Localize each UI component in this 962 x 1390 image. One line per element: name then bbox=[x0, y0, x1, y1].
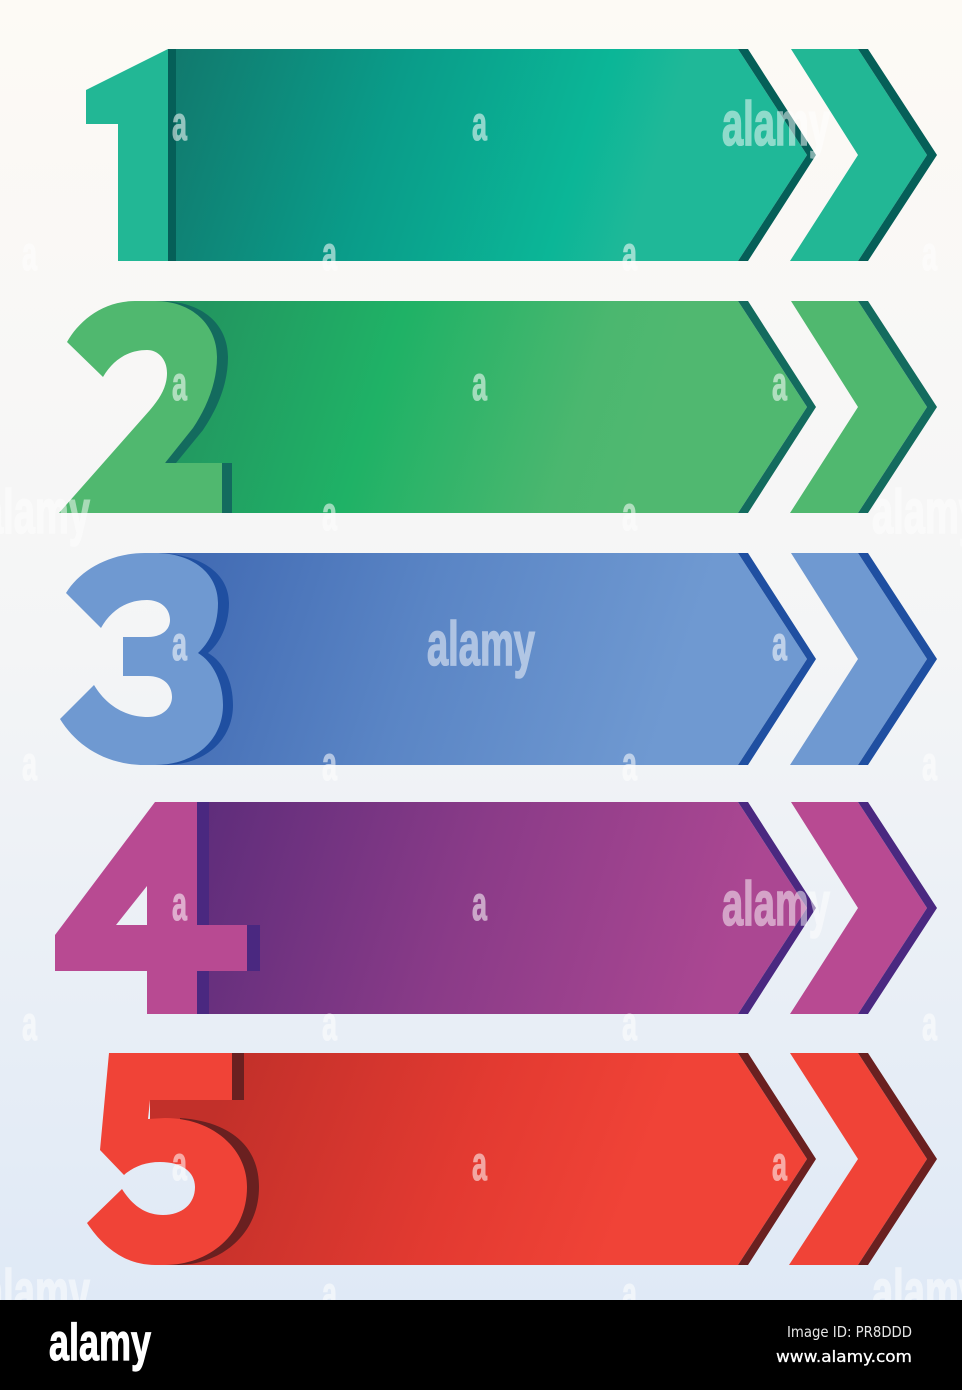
watermark marks: a bbox=[622, 998, 637, 1051]
watermark marks: alamy bbox=[722, 90, 830, 159]
banner 4 panel bbox=[197, 802, 807, 1014]
watermark marks: a bbox=[472, 878, 487, 931]
banner 5 numeral shadow bbox=[165, 1053, 259, 1265]
banner 5 arrow edge shadow bbox=[738, 1053, 816, 1265]
footer logo: alamy bbox=[49, 1314, 151, 1372]
banner 2 bbox=[59, 301, 937, 513]
watermark marks: a bbox=[472, 358, 487, 411]
watermark marks: a bbox=[172, 358, 187, 411]
banner 2 chevron bbox=[790, 301, 937, 513]
watermark marks: a bbox=[22, 998, 37, 1051]
banner 5 bbox=[87, 1053, 937, 1265]
banner 3 numeral shadow bbox=[150, 553, 233, 765]
watermark marks: a bbox=[322, 228, 337, 281]
watermark marks: a bbox=[172, 618, 187, 671]
watermark marks: a bbox=[922, 228, 937, 281]
banner 3 chevron bbox=[790, 553, 937, 765]
watermark marks: a bbox=[622, 1268, 637, 1321]
banner 2 panel bbox=[160, 301, 807, 513]
watermark marks: a bbox=[772, 358, 787, 411]
watermark marks: a bbox=[172, 98, 187, 151]
banner 1 bbox=[86, 49, 937, 261]
watermark marks: a bbox=[22, 228, 37, 281]
banner 3 bbox=[60, 553, 937, 765]
banner 4 chevron bbox=[790, 802, 937, 1014]
watermark marks: a bbox=[322, 488, 337, 541]
image id: Image ID: PR8DDD bbox=[787, 1323, 912, 1341]
numeral 1 bbox=[86, 49, 168, 261]
watermark marks: a bbox=[172, 1138, 187, 1191]
banner 1 arrow edge shadow bbox=[738, 49, 816, 261]
banner 1 panel bbox=[168, 49, 807, 261]
watermark marks: a bbox=[472, 1138, 487, 1191]
banner 4 numeral shadow bbox=[197, 802, 260, 1014]
watermark marks: a bbox=[322, 1268, 337, 1321]
numeral 5 bbox=[87, 1053, 247, 1265]
numeral 4 bbox=[55, 802, 247, 1014]
watermark marks: a bbox=[772, 618, 787, 671]
footer bar bbox=[0, 1300, 962, 1390]
banner 3 panel bbox=[155, 553, 807, 765]
watermark marks: a bbox=[22, 738, 37, 791]
banner 5 panel bbox=[150, 1053, 807, 1265]
watermark marks: a bbox=[922, 998, 937, 1051]
watermark marks: a bbox=[922, 738, 937, 791]
banner 1 numeral shadow bbox=[168, 49, 176, 261]
banner 4 bbox=[55, 802, 937, 1014]
numeral 3 bbox=[60, 553, 223, 765]
banner 2 numeral shadow bbox=[155, 301, 232, 513]
banner 1 chevron bbox=[790, 49, 937, 261]
watermark marks: a bbox=[622, 738, 637, 791]
numeral 2 bbox=[59, 301, 222, 513]
watermark marks: a bbox=[622, 228, 637, 281]
watermark marks: alamy bbox=[722, 870, 830, 939]
watermark marks: a bbox=[472, 98, 487, 151]
watermark marks: a bbox=[322, 738, 337, 791]
banner 2 arrow edge shadow bbox=[738, 301, 816, 513]
watermark marks: a bbox=[622, 488, 637, 541]
banner 5 chevron bbox=[789, 1053, 937, 1265]
banner 4 arrow edge shadow bbox=[738, 802, 816, 1014]
watermark marks: a bbox=[772, 1138, 787, 1191]
site url: www.alamy.com bbox=[776, 1347, 912, 1366]
watermark marks: a bbox=[172, 878, 187, 931]
watermark marks: alamy bbox=[427, 610, 535, 679]
watermark marks: a bbox=[322, 998, 337, 1051]
banner 3 arrow edge shadow bbox=[738, 553, 816, 765]
